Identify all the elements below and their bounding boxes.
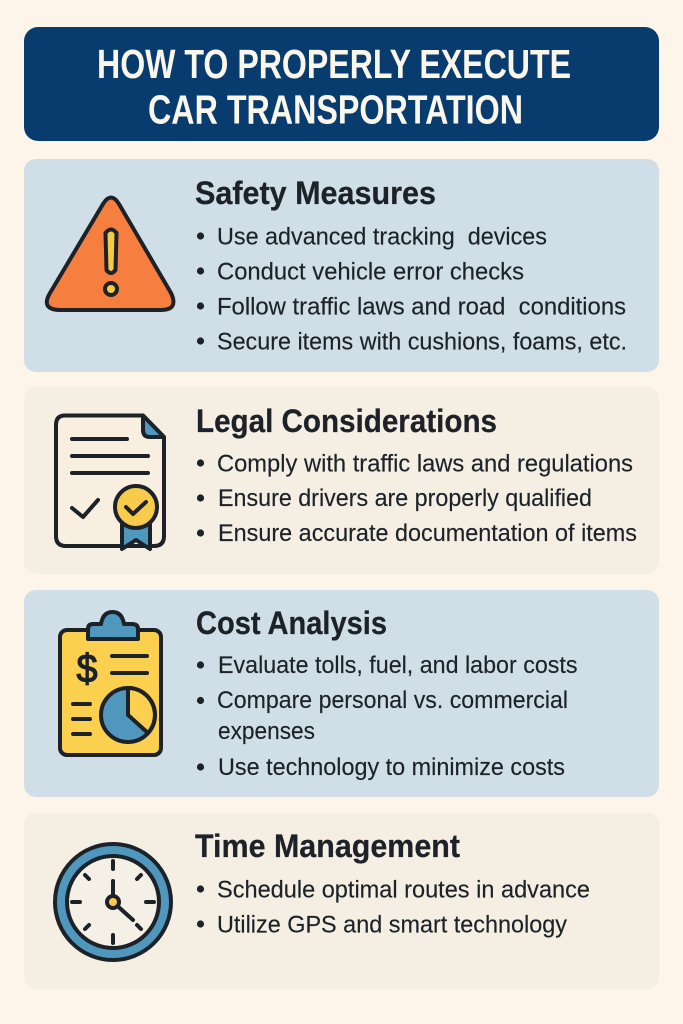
icon: clipboard with chart xyxy=(60,612,161,755)
list: cost analysis xyxy=(197,652,578,781)
heading: safety measures: Safety Measures xyxy=(195,175,436,211)
list: cost analysis: Evaluate tolls, fuel, and labor costs xyxy=(218,652,578,679)
list: time management: Utilize GPS and smart technology xyxy=(217,912,568,938)
heading: legal considerations: Legal Considerations xyxy=(196,403,497,439)
panel: safety measures xyxy=(24,159,659,372)
list: safety measures: Conduct vehicle error checks xyxy=(217,258,524,286)
list: cost analysis: Compare personal vs. commercial xyxy=(217,687,568,714)
heading: time management: Time Management xyxy=(195,828,460,864)
panel: legal considerations xyxy=(24,387,659,574)
icon: warning triangle xyxy=(47,198,173,310)
list: cost analysis: Use technology to minimize costs xyxy=(218,754,565,781)
list: legal considerations xyxy=(197,450,637,547)
list: legal considerations: Comply with traffic laws and regulations xyxy=(217,450,633,478)
panel: time management xyxy=(24,813,659,989)
title line 2: CAR TRANSPORTATION xyxy=(148,86,523,132)
list: safety measures: Follow traffic laws and road conditions xyxy=(217,294,626,320)
list: time management: Schedule optimal routes in advance xyxy=(217,876,590,904)
list: safety measures: Use advanced tracking devices xyxy=(217,224,547,250)
icon: clipboard with chart: $ xyxy=(76,647,98,691)
list: safety measures: Secure items with cushions, foams, etc. xyxy=(217,328,627,356)
heading: cost analysis: Cost Analysis xyxy=(196,605,387,641)
icon: legal document xyxy=(56,416,164,549)
list: time management xyxy=(197,876,590,938)
list: legal considerations: Ensure drivers are properly qualified xyxy=(218,485,592,512)
list: safety measures xyxy=(197,224,627,356)
title banner xyxy=(24,27,659,141)
list: cost analysis: expenses xyxy=(218,718,315,745)
icon: clock xyxy=(55,844,171,960)
panel: cost analysis xyxy=(24,590,659,797)
list: legal considerations: Ensure accurate documentation of items xyxy=(218,520,637,547)
